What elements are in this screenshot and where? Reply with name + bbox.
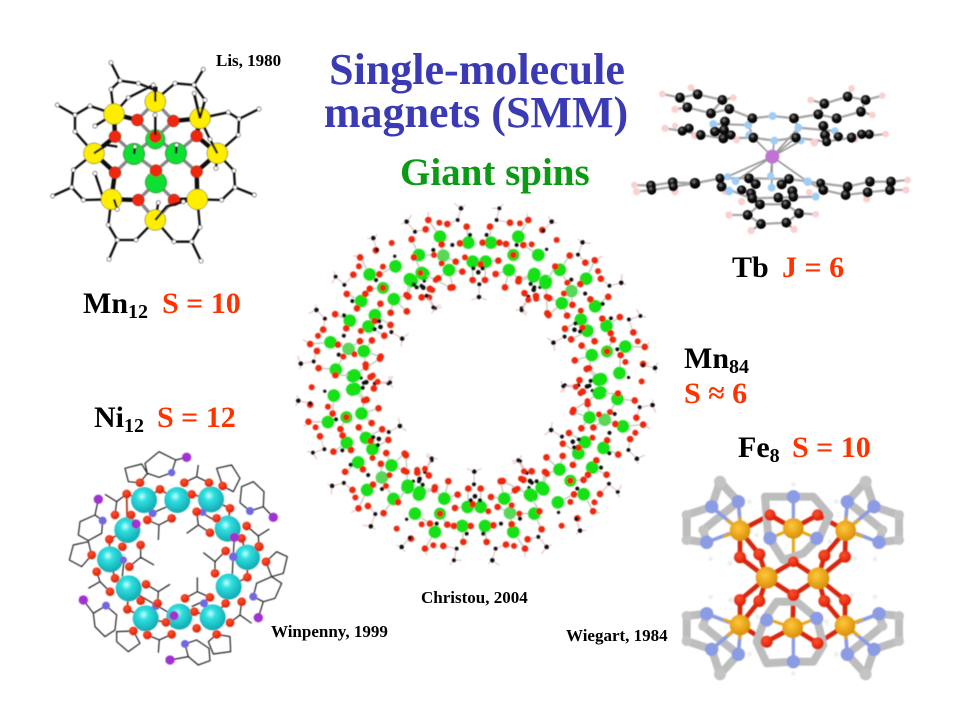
label: Mn12 S = 10: 12	[128, 301, 148, 323]
citation: Lis, 1980: Lis, 1980	[216, 51, 281, 70]
label: Mn84 S ≈ 6: Mn	[684, 342, 729, 375]
title: Single-molecule	[329, 45, 625, 94]
molecule: Tb double-decker	[631, 84, 911, 234]
citation: Christou, 2004: Christou, 2004	[421, 588, 528, 607]
molecule: Mn12	[51, 61, 261, 263]
label: Mn84 S ≈ 6: S ≈ 6	[684, 377, 747, 410]
molecule: Ni12 wheel	[69, 452, 287, 665]
label: Fe8 S = 10: 8	[770, 445, 780, 467]
label: Mn84 S ≈ 6: 84	[729, 356, 749, 378]
molecule: Fe8 cluster	[682, 476, 904, 680]
title: magnets (SMM)	[324, 88, 628, 137]
subtitle: giant spins: Giant spins	[400, 151, 590, 194]
label: Ni12 S = 12: S = 12	[157, 401, 236, 434]
label: Ni12 S = 12: Ni	[94, 401, 124, 434]
citation: Winpenny, 1999: Winpenny, 1999	[271, 622, 388, 641]
label: Mn12 S = 10: S = 10	[162, 287, 241, 320]
label: Ni12 S = 12: 12	[124, 415, 144, 437]
citation: Wiegart, 1984: Wiegart, 1984	[566, 626, 668, 645]
label: Fe8 S = 10: S = 10	[792, 431, 871, 464]
label: Mn12 S = 10: Mn	[83, 287, 128, 320]
label: Fe8 S = 10: Fe	[738, 431, 770, 464]
label: Tb J = 6: Tb	[732, 251, 769, 284]
molecule: Mn84 ring	[278, 203, 675, 565]
label: Tb J = 6: J = 6	[782, 251, 844, 284]
